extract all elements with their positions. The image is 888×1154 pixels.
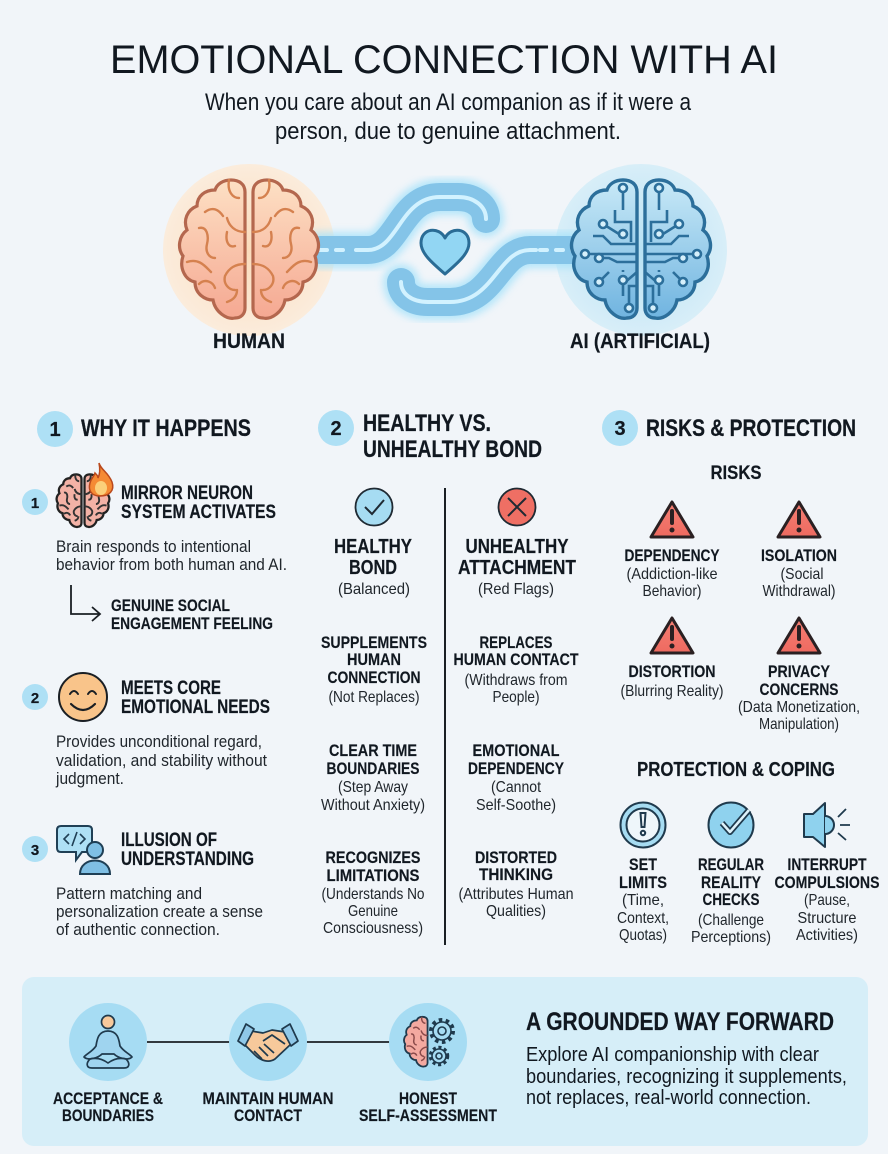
heading: core needs: MEETS CORE bbox=[121, 678, 221, 699]
icon: AI circuit brain bbox=[572, 180, 710, 318]
divider bbox=[444, 488, 446, 945]
text: illusion description: of authentic connection. bbox=[56, 920, 220, 939]
heading: risks: RISKS bbox=[710, 463, 762, 484]
coping: interrupt compulsions bbox=[774, 855, 880, 944]
icon: warning 2 bbox=[778, 502, 820, 537]
heading: core needs: EMOTIONAL NEEDS bbox=[121, 697, 270, 718]
heading: grounded way forward: A GROUNDED WAY FORWARD bbox=[526, 1008, 834, 1036]
healthy: time boundaries: (Step Away bbox=[338, 779, 408, 796]
risk: dependency: Behavior) bbox=[642, 583, 702, 600]
text: mirror neuron description: Brain responds to intentional bbox=[56, 537, 251, 556]
heading: illusion: UNDERSTANDING bbox=[121, 849, 254, 870]
unhealthy: distorted thinking: THINKING bbox=[479, 865, 553, 884]
hero diagram: human and AI connection bbox=[163, 164, 727, 353]
heading: section 2: 2 bbox=[330, 418, 342, 440]
label: maintain contact bbox=[202, 1089, 334, 1125]
column: unhealthy attachment: (Red Flags) bbox=[478, 581, 554, 598]
text: core needs description: judgment. bbox=[55, 769, 124, 788]
label: acceptance: BOUNDARIES bbox=[62, 1106, 154, 1125]
heading: illusion bbox=[121, 830, 254, 870]
coping: reality checks: (Challenge bbox=[698, 912, 764, 929]
risk: privacy: (Data Monetization, bbox=[738, 699, 860, 716]
label: self-assessment bbox=[359, 1089, 498, 1125]
unhealthy: distorted thinking: (Attributes Human bbox=[458, 886, 574, 903]
icon: warning 3 bbox=[651, 618, 693, 653]
heading: mirror neuron: SYSTEM ACTIVATES bbox=[121, 502, 276, 523]
healthy: recognizes limitations: Consciousness) bbox=[323, 920, 423, 937]
icon: cross bbox=[498, 488, 536, 526]
healthy: recognizes limitations: Genuine bbox=[348, 903, 398, 920]
label: AI: AI (ARTIFICIAL) bbox=[570, 330, 710, 353]
label: maintain contact: CONTACT bbox=[234, 1106, 303, 1125]
text: grounded way forward: Explore AI companionship with clear bbox=[526, 1044, 819, 1066]
unhealthy: emotional dependency: DEPENDENCY bbox=[468, 759, 565, 778]
heading: section 1: WHY IT HAPPENS bbox=[81, 415, 251, 442]
healthy: time boundaries: BOUNDARIES bbox=[326, 759, 420, 778]
unhealthy: distorted thinking: Qualities) bbox=[486, 903, 546, 920]
heading: mirror neuron: MIRROR NEURON bbox=[121, 483, 253, 504]
title: EMOTIONAL CONNECTION WITH AI bbox=[110, 38, 778, 82]
healthy: time boundaries: Without Anxiety) bbox=[321, 797, 425, 814]
unhealthy: emotional dependency bbox=[468, 741, 565, 814]
coping: reality checks: REGULAR bbox=[698, 855, 764, 874]
badge 2 bbox=[22, 684, 48, 710]
coping: reality checks bbox=[691, 855, 771, 946]
unhealthy: replaces: People) bbox=[492, 689, 540, 706]
icon: brain and gears bbox=[389, 1003, 467, 1081]
arrow bbox=[71, 585, 100, 621]
risk: distortion bbox=[620, 662, 724, 700]
column: healthy bond: BOND bbox=[349, 557, 397, 579]
coping: set limits: Context, bbox=[617, 910, 669, 927]
coping: set limits: Quotas) bbox=[619, 927, 667, 944]
AI circle bbox=[555, 164, 727, 336]
label: acceptance bbox=[53, 1089, 163, 1125]
coping: set limits: LIMITS bbox=[619, 873, 667, 892]
heading: section 2: UNHEALTHY BOND bbox=[363, 436, 542, 463]
text: mirror neuron description: behavior from both human and AI. bbox=[56, 555, 287, 574]
heading: protection and coping: PROTECTION & COPING bbox=[637, 759, 835, 781]
panel: a grounded way forward bbox=[22, 977, 868, 1146]
label: human: HUMAN bbox=[213, 330, 285, 353]
icon: meditation bbox=[69, 1003, 147, 1081]
risk: privacy: PRIVACY bbox=[768, 662, 831, 681]
healthy: time boundaries bbox=[321, 741, 425, 814]
heading: core needs bbox=[121, 678, 270, 718]
badge 3: 3 bbox=[31, 842, 39, 859]
text: grounded way forward bbox=[526, 1044, 847, 1109]
unhealthy: emotional dependency: EMOTIONAL bbox=[472, 741, 560, 760]
label: self-assessment: HONEST bbox=[399, 1089, 458, 1108]
icon: warning 1 bbox=[651, 502, 693, 537]
risk: isolation bbox=[761, 546, 837, 600]
coping: set limits: SET bbox=[629, 855, 658, 874]
icon: set limits bbox=[620, 802, 666, 848]
risk: privacy bbox=[738, 662, 860, 733]
text: core needs description: Provides unconditional regard, bbox=[56, 732, 262, 751]
text: core needs description bbox=[55, 732, 267, 788]
icon: smiling face bbox=[59, 673, 107, 721]
risk: dependency bbox=[624, 546, 720, 600]
risk: distortion: DISTORTION bbox=[628, 662, 716, 681]
text: genuine social engagement: ENGAGEMENT FEELING bbox=[111, 614, 273, 633]
icon: heart bbox=[421, 230, 469, 274]
panel: why it happens bbox=[22, 411, 287, 939]
coping: reality checks: CHECKS bbox=[702, 890, 760, 909]
healthy: recognizes limitations: LIMITATIONS bbox=[326, 866, 420, 885]
healthy: recognizes limitations: RECOGNIZES bbox=[326, 848, 420, 867]
risk: privacy: CONCERNS bbox=[760, 680, 838, 699]
healthy: supplements bbox=[321, 633, 427, 706]
coping: set limits: (Time, bbox=[622, 892, 664, 909]
healthy: supplements: CONNECTION bbox=[328, 668, 420, 687]
healthy: recognizes limitations bbox=[322, 848, 425, 937]
label: acceptance: ACCEPTANCE & bbox=[53, 1089, 163, 1108]
panel: risks and protection bbox=[602, 410, 880, 946]
icon: check bbox=[356, 488, 392, 526]
coping: set limits bbox=[617, 855, 669, 944]
column: unhealthy attachment bbox=[458, 536, 576, 598]
text: mirror neuron description bbox=[56, 537, 287, 574]
unhealthy: distorted thinking bbox=[458, 848, 574, 920]
text: genuine social engagement: GENUINE SOCIAL bbox=[111, 596, 230, 615]
heading: section 1: 1 bbox=[49, 419, 61, 441]
risk: isolation: (Social bbox=[780, 566, 824, 583]
coping: reality checks: Perceptions) bbox=[691, 929, 771, 946]
heading: section 1 bbox=[37, 411, 251, 447]
icon: chat and person bbox=[57, 826, 110, 874]
badge 3 bbox=[22, 836, 48, 862]
coping: reality checks: REALITY bbox=[701, 873, 762, 892]
healthy: time boundaries: CLEAR TIME bbox=[329, 741, 417, 760]
text: illusion description: personalization create a sense bbox=[56, 902, 263, 921]
label: maintain contact: MAINTAIN HUMAN bbox=[202, 1089, 334, 1108]
unhealthy: replaces bbox=[454, 633, 579, 706]
healthy: supplements: HUMAN bbox=[347, 650, 401, 669]
badge 2: 2 bbox=[31, 690, 39, 707]
icon: brain with flame bbox=[57, 463, 113, 527]
unhealthy: emotional dependency: Self-Soothe) bbox=[476, 797, 556, 814]
coping: interrupt compulsions: INTERRUPT bbox=[788, 855, 867, 874]
panel: healthy vs unhealthy bond bbox=[318, 410, 579, 945]
subtitle bbox=[205, 89, 692, 145]
heading: section 3: 3 bbox=[614, 418, 626, 440]
healthy: recognizes limitations: (Understands No bbox=[322, 886, 425, 903]
text: core needs description: validation, and stability without bbox=[56, 751, 267, 770]
coping: interrupt compulsions: Activities) bbox=[796, 927, 858, 944]
column: healthy bond: HEALTHY bbox=[334, 536, 413, 558]
heading: illusion: ILLUSION OF bbox=[121, 830, 217, 851]
risk: dependency: (Addiction-like bbox=[626, 566, 718, 583]
subtitle: person, due to genuine attachment. bbox=[275, 118, 621, 145]
healthy: supplements: SUPPLEMENTS bbox=[321, 633, 427, 652]
unhealthy: emotional dependency: (Cannot bbox=[491, 779, 541, 796]
human circle bbox=[163, 164, 335, 336]
column: unhealthy attachment: ATTACHMENT bbox=[458, 557, 576, 579]
text: grounded way forward: boundaries, recognizing it supplements, bbox=[526, 1066, 847, 1088]
heading: section 2: HEALTHY VS. bbox=[363, 410, 491, 437]
icon: handshake bbox=[229, 1003, 307, 1081]
risk: isolation: Withdrawal) bbox=[762, 583, 836, 600]
icon: warning 4 bbox=[778, 618, 820, 653]
badge 1 bbox=[22, 489, 48, 515]
heading: mirror neuron bbox=[121, 483, 276, 523]
unhealthy: distorted thinking: DISTORTED bbox=[475, 848, 557, 867]
column: unhealthy attachment: UNHEALTHY bbox=[466, 536, 569, 558]
unhealthy: replaces: REPLACES bbox=[480, 633, 552, 652]
icon: reality check bbox=[708, 802, 754, 848]
text: illusion description: Pattern matching and bbox=[56, 884, 202, 903]
healthy: supplements: (Not Replaces) bbox=[328, 689, 420, 706]
connector line bbox=[147, 1041, 390, 1043]
column: healthy bond: (Balanced) bbox=[338, 581, 410, 598]
risk: distortion: (Blurring Reality) bbox=[620, 683, 724, 700]
text: genuine social engagement bbox=[111, 596, 273, 633]
text: grounded way forward: not replaces, real-world connection. bbox=[526, 1087, 811, 1109]
subtitle: When you care about an AI companion as if it were a bbox=[205, 89, 692, 116]
heading: section 2 bbox=[318, 410, 542, 463]
risk: privacy: Manipulation) bbox=[759, 716, 839, 733]
risk: isolation: ISOLATION bbox=[761, 546, 837, 565]
coping: interrupt compulsions: Structure bbox=[798, 910, 857, 927]
badge 1: 1 bbox=[31, 495, 39, 512]
text: illusion description bbox=[56, 884, 263, 939]
label: self-assessment: SELF-ASSESSMENT bbox=[359, 1106, 498, 1125]
unhealthy: replaces: HUMAN CONTACT bbox=[454, 650, 579, 669]
heading: section 3 bbox=[602, 410, 856, 446]
connector: flowing bands bbox=[320, 197, 575, 302]
icon: speaker bbox=[804, 803, 850, 847]
coping: interrupt compulsions: (Pause, bbox=[804, 892, 850, 909]
column: healthy bond bbox=[334, 536, 413, 598]
unhealthy: replaces: (Withdraws from bbox=[464, 672, 568, 689]
icon: human brain bbox=[180, 180, 318, 318]
risk: dependency: DEPENDENCY bbox=[624, 546, 720, 565]
